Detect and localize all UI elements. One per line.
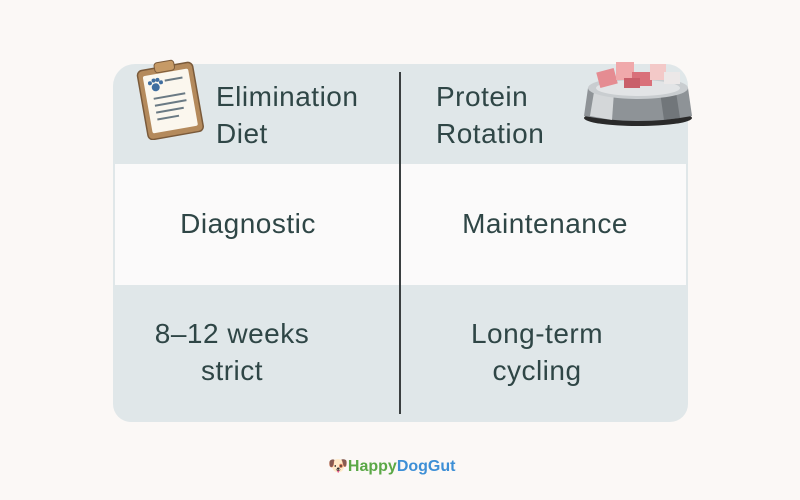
heading: Protein Rotation: Protein bbox=[436, 81, 528, 112]
heading: Protein Rotation: Rotation bbox=[436, 118, 544, 149]
text: 8–12 weeks strict: strict bbox=[201, 355, 263, 386]
heading: Elimination Diet: Elimination bbox=[216, 81, 358, 112]
heading: Protein Rotation bbox=[436, 81, 544, 149]
text: Long-term cycling: Long-term bbox=[471, 318, 603, 349]
text: 8–12 weeks strict bbox=[155, 318, 309, 386]
icon: clipboard bbox=[136, 60, 204, 140]
text: Diagnostic: Diagnostic bbox=[180, 208, 316, 239]
text: Long-term cycling bbox=[471, 318, 603, 386]
heading: Elimination Diet bbox=[216, 81, 358, 149]
panel: comparison table bbox=[113, 64, 688, 422]
text: 8–12 weeks strict: 8–12 weeks bbox=[155, 318, 309, 349]
heading: Elimination Diet: Diet bbox=[216, 118, 268, 149]
logo: HappyDogGut: 🐶HappyDogGut bbox=[328, 458, 455, 475]
text: Maintenance: Maintenance bbox=[462, 208, 628, 239]
divider line bbox=[399, 72, 400, 414]
white middle row bbox=[115, 164, 686, 285]
text: Long-term cycling: cycling bbox=[492, 355, 582, 386]
icon: food bowl bbox=[584, 62, 692, 126]
